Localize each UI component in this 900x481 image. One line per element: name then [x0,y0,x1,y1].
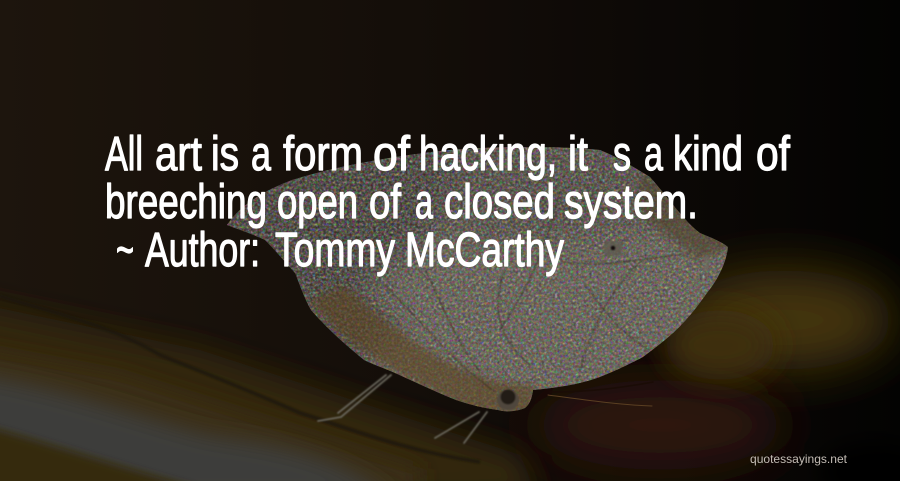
gray band [0,372,395,481]
line 1: s [613,128,631,181]
quote text [105,128,791,277]
line 1: kind [673,128,743,181]
line 2 [105,176,698,229]
line 1: of [756,128,791,181]
branch: dark line [0,296,480,462]
leaf speckle [227,147,728,412]
line 3: author: Tommy [275,224,395,277]
line 2: system. [564,176,698,229]
line 2: open [277,176,358,229]
leaf brown edge [310,285,535,415]
leaf shading [228,149,462,364]
lower-left yellow [0,425,240,481]
line 1: is [211,128,239,181]
line 1: art [155,128,202,181]
line 2: a [415,176,433,229]
line 1: All [105,128,143,181]
leaf eye spot [497,390,519,410]
line 3: author [116,224,564,277]
leaf wing [227,147,728,412]
line 1: a [251,128,271,181]
line 2: of [369,176,402,229]
antennae [548,382,653,406]
watermark: quotessayings.net [750,452,848,466]
line 2: breeching [105,176,267,229]
line 3: author: Author: [145,224,260,277]
line 1: form [283,128,363,181]
line 3: author: ~ [116,224,134,277]
leaf veins [385,190,690,392]
glow: lower right red-brown [535,380,785,470]
line 3: author: McCarthy [405,224,564,277]
line 1 [105,128,791,181]
insect legs [318,375,487,443]
line 1: it [568,128,588,181]
line 2: closed [444,176,555,229]
leaf spot [604,241,622,256]
line 1: hacking, [419,128,557,181]
line 1: a [644,128,663,181]
branch: olive strip [0,300,540,481]
leaf pale patch [704,255,710,271]
line 1: of [373,128,411,181]
leaf base [227,147,728,412]
glow: right olive [675,270,895,370]
